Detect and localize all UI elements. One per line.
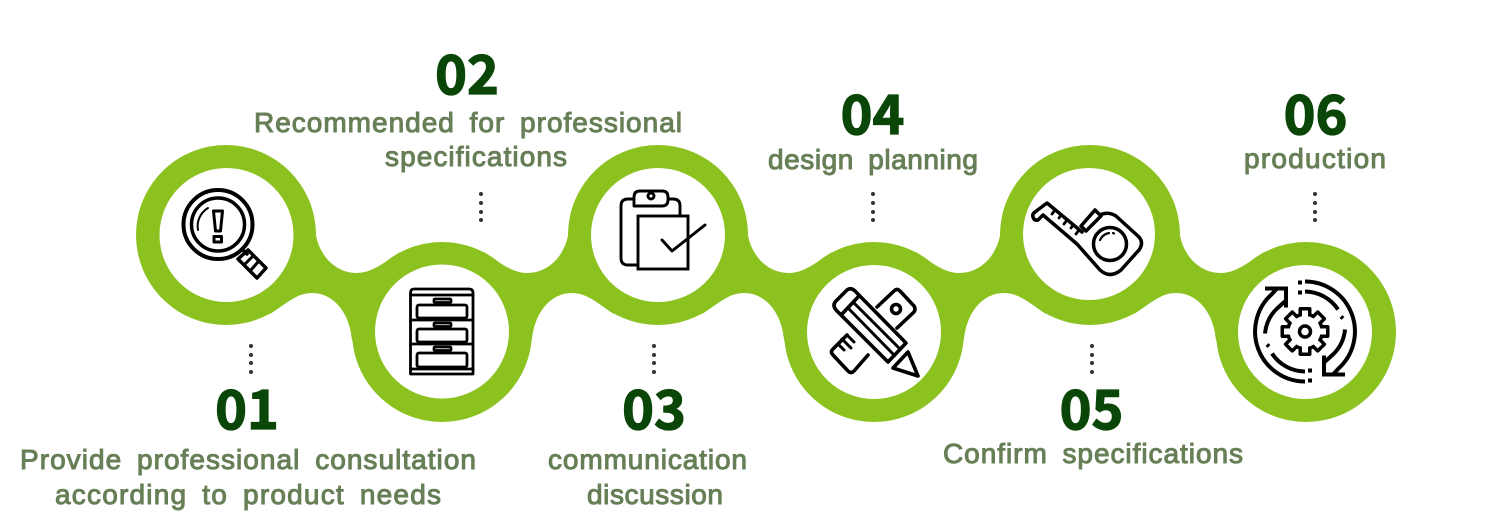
step 06 text: 06 (1284, 71, 1347, 150)
icon: gear with circular arrows (1255, 282, 1355, 382)
icon: clipboard with check mark (621, 191, 705, 269)
step 06 dotted connector (1313, 192, 1317, 222)
step 04 text: 04 (841, 71, 904, 150)
step 03 dotted connector (652, 344, 656, 374)
step 02 text: 02 (435, 31, 499, 110)
step 05 text (943, 366, 1243, 469)
green ribbon of linked rings (136, 145, 1396, 422)
step 02 text: Recommended for professional (254, 107, 682, 138)
step 02 dotted connector (479, 192, 483, 222)
step 01 text (20, 366, 476, 510)
step 03 text (548, 366, 747, 510)
step 03 text: communication (548, 444, 747, 475)
step 02 text (254, 31, 682, 172)
step 03 text: 03 (622, 366, 686, 445)
step 01 dotted connector (249, 344, 253, 374)
step 01 text: according to product needs (55, 479, 441, 510)
step 06 text (1244, 71, 1386, 174)
step 02 text: specifications (385, 141, 567, 172)
step 05 text: 05 (1060, 366, 1123, 445)
step 04 text: design planning (768, 144, 978, 175)
step 05 text: Confirm specifications (943, 438, 1243, 469)
step 05 dotted connector (1090, 344, 1094, 374)
step 06 text: production (1244, 143, 1386, 174)
step 01 text: 01 (215, 366, 279, 445)
step 03 text: discussion (587, 479, 723, 510)
icon: filing drawers (410, 289, 473, 374)
icon: crossed pencil and ruler (832, 289, 918, 376)
icon: magnifier with exclamation mark (184, 190, 266, 278)
step 04 text (768, 71, 978, 175)
icon: tape measure (1033, 203, 1142, 274)
step 04 dotted connector (871, 192, 875, 222)
step 01 text: Provide professional consultation (20, 444, 476, 475)
